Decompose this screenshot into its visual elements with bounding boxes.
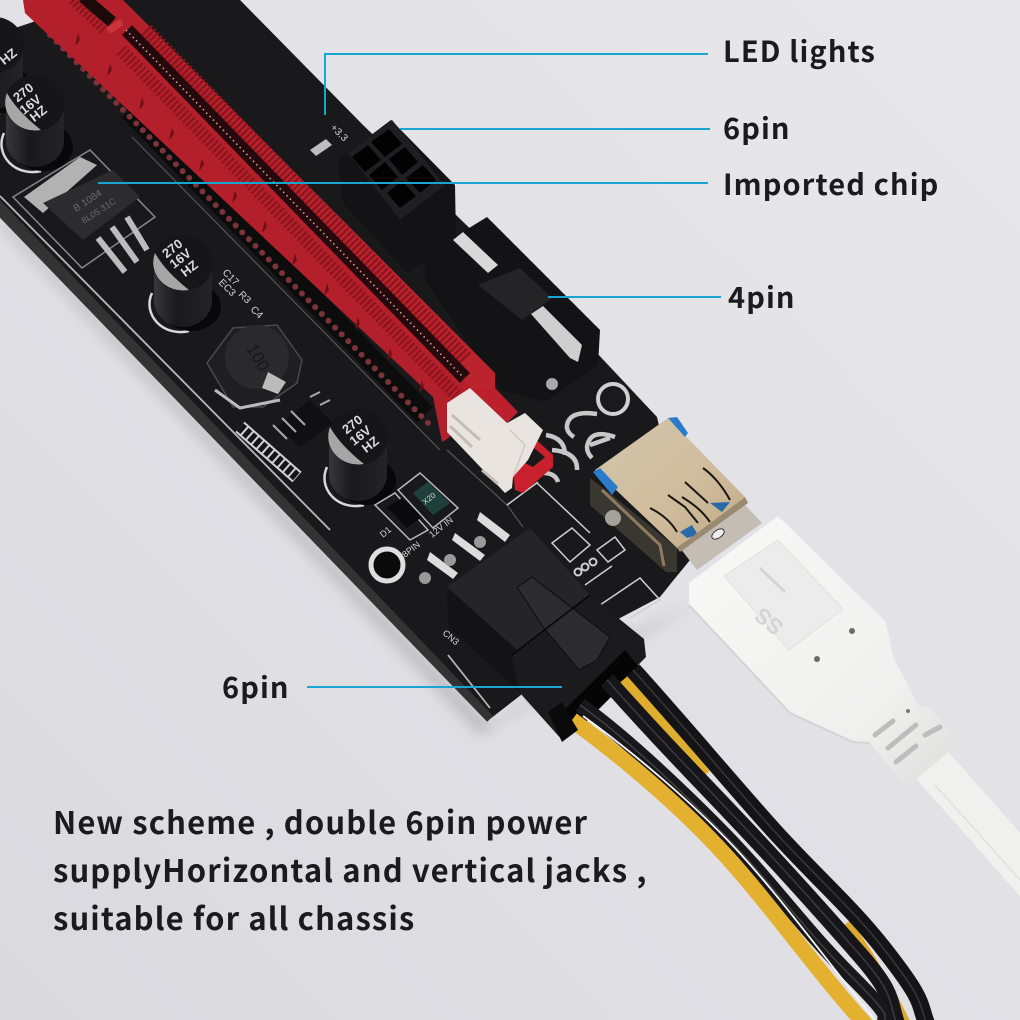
description text: supplyHorizontal and vertical jacks , xyxy=(53,846,648,891)
silkscreen labels: EC3 xyxy=(216,277,238,299)
silkscreen labels: C17 xyxy=(220,267,241,288)
6pin connector top xyxy=(338,120,456,273)
USB plug xyxy=(689,516,957,787)
fuse and diode: 12V IN xyxy=(427,515,455,540)
CE marks xyxy=(540,413,615,482)
silkscreen LED marking xyxy=(310,122,350,156)
lower 6pin connector xyxy=(419,512,646,741)
silkscreen labels: C4 xyxy=(248,304,265,321)
silkscreen LED marking: +3.3 xyxy=(328,122,350,144)
red PCIe slot xyxy=(23,0,518,442)
slot teeth upper xyxy=(146,30,467,360)
slot step marks xyxy=(75,33,424,393)
USB socket xyxy=(590,417,762,572)
USB plug: SS xyxy=(750,602,788,640)
board shadow xyxy=(0,215,700,735)
capacitors: 270 xyxy=(339,412,365,437)
PCB riser board xyxy=(0,0,690,719)
description text: New scheme , double 6pin power xyxy=(53,798,588,843)
regulator chip: B 1084 xyxy=(72,188,105,215)
USB cable xyxy=(932,765,1020,887)
silkscreen labels xyxy=(216,267,265,321)
description text: suitable for all chassis xyxy=(53,894,415,939)
regulator chip: 8L05 31C xyxy=(80,196,118,226)
connector front block xyxy=(548,702,578,742)
power wires xyxy=(572,670,927,1020)
capacitors: 16V xyxy=(346,422,374,448)
4pin connector xyxy=(425,217,600,402)
white latch with red hook xyxy=(447,388,553,493)
capacitors: 270 xyxy=(10,80,36,105)
inductor: 100 xyxy=(243,340,273,375)
lower 6pin connector: CN3 xyxy=(441,628,461,647)
fuse and diode: D1 xyxy=(378,524,393,540)
callout: 4pin: 4pin xyxy=(728,275,796,317)
slot opening xyxy=(127,30,465,378)
capacitors xyxy=(0,17,396,506)
capacitors: 270 xyxy=(159,236,185,261)
silkscreen pads near socket xyxy=(507,482,660,618)
callout: 6pin top: 6pin xyxy=(723,106,791,148)
callout: Imported chip: Imported chip xyxy=(723,162,939,204)
regulator chip xyxy=(13,150,155,272)
fuse and diode: X20 xyxy=(421,490,438,507)
mounting holes xyxy=(371,384,628,581)
solder joints row xyxy=(50,35,430,425)
callout: 6pin bottom: 6pin xyxy=(222,665,290,707)
capacitors: HZ xyxy=(27,102,50,125)
inductor xyxy=(207,325,302,408)
fuse and diode: 8PIN xyxy=(400,539,422,560)
silkscreen labels: R3 xyxy=(236,289,253,306)
capacitors: 16V xyxy=(16,91,44,117)
callout: LED lights: LED lights xyxy=(723,29,876,71)
silkscreen pad row xyxy=(240,427,297,477)
capacitors: 16V xyxy=(166,245,194,271)
capacitors: HZ xyxy=(359,433,382,456)
small IC xyxy=(273,392,333,447)
capacitors: HZ xyxy=(178,257,201,280)
fuse and diode xyxy=(375,473,458,560)
callout: LED lights xyxy=(325,29,876,115)
slot teeth lower xyxy=(121,50,456,395)
description text xyxy=(53,798,648,939)
